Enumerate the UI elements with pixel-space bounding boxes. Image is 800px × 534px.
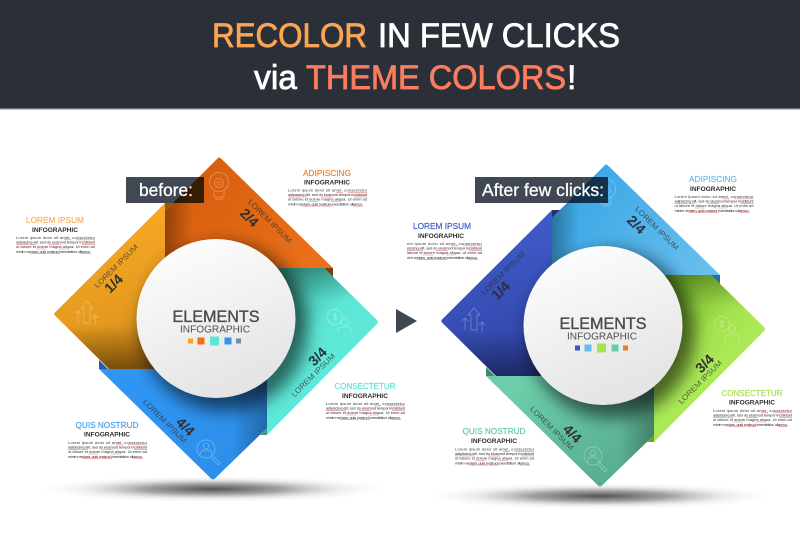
text block: quis nostrud after: adipiscing elit, sed do eiusmod tempor incididunt	[455, 451, 535, 456]
circle shadow	[140, 243, 308, 411]
label: before	[126, 177, 204, 203]
text block: quis nostrud after: ut labore et dolore magna aliqua. Ut enim ad	[455, 456, 534, 461]
text block: consectetur after: ut labore et dolore magna aliqua. Ut enim ad	[713, 417, 792, 422]
segment 1/4 orange	[54, 203, 173, 369]
text block: quis nostrud after: QUIS NOSTRUD	[462, 426, 526, 436]
segment labels: 4/4	[560, 421, 585, 446]
title line 1: IN FEW CLICKS	[378, 17, 620, 55]
segment labels: LOREM IPSUM	[480, 250, 527, 297]
text block: lorem ipsum before: INFOGRAPHIC	[32, 227, 78, 234]
disc title: ELEMENTS	[172, 308, 260, 326]
segment 2/4 dark orange	[165, 158, 333, 277]
central disc	[524, 246, 682, 405]
label: after few clicks: After few clicks:	[482, 180, 604, 200]
text block: quis nostrud before: minim veniam, quis nostrud exercitation ullamco.	[68, 454, 143, 459]
segment labels: LOREM IPSUM	[677, 359, 724, 406]
text block: adipiscing before	[288, 168, 368, 206]
text block: consectetur after: CONSECTETUR	[722, 388, 782, 398]
text block: quis nostrud after: Lorem ipsum dolor sit amet, consectetur	[455, 446, 535, 452]
ground shadow right	[428, 483, 772, 509]
text block: adipiscing before: ut labore et dolore magna aliqua. Ut enim ad	[288, 197, 367, 202]
colour swatches	[575, 344, 628, 352]
text block: lorem ipsum before: minim veniam, quis nostrud exercitation ullamco.	[16, 249, 91, 254]
arrow between diagrams	[396, 309, 417, 333]
title line 1	[212, 17, 620, 55]
icon: light bulb with gear	[210, 172, 228, 199]
disc title: ELEMENTS	[560, 315, 646, 333]
segment labels: 3/4	[692, 351, 717, 376]
text block: lorem ipsum after: em ipsum dolor sit amet, consectetur	[407, 241, 483, 246]
label: before: before:	[139, 180, 193, 200]
segment 4/4 mint	[486, 367, 654, 486]
icon: light bulb with gear	[596, 180, 616, 206]
text block: lorem ipsum after: labore et dolore magna aliqua. Ut enim ad	[407, 250, 482, 255]
text block: adipiscing before: minim veniam, quis nostrud exercitation ullamco.	[288, 201, 363, 206]
segment labels: 1/4	[101, 271, 126, 296]
segment labels: LOREM IPSUM	[141, 398, 188, 445]
diagram: after few clicks	[441, 164, 765, 486]
segment labels: 2/4	[624, 212, 649, 237]
text block: adipiscing after: minim veniam, quis nostrud exercitation ullamco.	[674, 208, 750, 213]
segment labels: 1/4	[488, 278, 513, 303]
disc subtitle: INFOGRAPHIC	[180, 324, 250, 336]
text block: consectetur before	[326, 381, 406, 420]
text block: quis nostrud after: INFOGRAPHIC	[471, 438, 517, 445]
title line 2: via	[254, 59, 297, 97]
text block: lorem ipsum before	[16, 215, 96, 254]
text block: adipiscing after	[674, 174, 754, 213]
text block: adipiscing before: INFOGRAPHIC	[304, 180, 350, 186]
segment 4/4 blue	[99, 360, 267, 480]
text block: adipiscing before: adipiscing elit, sed do eiusmod tempor incididunt	[288, 192, 368, 197]
text block: adipiscing after: Lorem ipsum dolor sit amet, consectetur	[674, 194, 754, 199]
text block: consectetur after	[713, 388, 793, 427]
segment labels: LOREM IPSUM	[246, 198, 293, 245]
text block: quis nostrud before	[68, 420, 148, 459]
text block: lorem ipsum before: Lorem ipsum dolor sit amet, consectetur	[16, 235, 96, 240]
text block: consectetur after: minim veniam, quis nostrud exercitation ullamco.	[713, 422, 788, 427]
text block: adipiscing after: adipiscing elit, sed do eiusmod tempor incididunt	[674, 199, 754, 204]
text block: consectetur before: CONSECTETUR	[334, 381, 396, 391]
text block: quis nostrud before: adipiscing elit, sed do eiusmod tempor incididunt	[68, 445, 148, 450]
text block: consectetur before: Lorem ipsum dolor sit amet, consectetur	[326, 401, 406, 406]
text block: adipiscing after: INFOGRAPHIC	[690, 186, 736, 193]
segment 3/4 lime	[647, 275, 765, 442]
text block: quis nostrud after: minim veniam, quis nostrud exercitation ullamco.	[455, 460, 530, 465]
text block: quis nostrud before: QUIS NOSTRUD	[76, 420, 138, 430]
segment labels	[480, 205, 724, 452]
icon: money and person	[328, 310, 352, 333]
text block: quis nostrud after	[455, 426, 535, 465]
circle shadow	[527, 250, 695, 418]
icon: money and person	[714, 316, 739, 340]
text block: adipiscing before: Lorem ipsum dolor sit amet, consectetur	[288, 188, 368, 192]
segment 2/4 sky blue	[552, 164, 720, 284]
text block: consectetur before: ut labore et dolore magna aliqua. Ut enim ad	[326, 410, 405, 415]
icon: person in magnifier	[197, 440, 220, 465]
icon: person in magnifier	[584, 447, 607, 472]
text block: quis nostrud before: ut labore et dolore magna aliqua. Ut enim ad	[68, 449, 147, 454]
text block: lorem ipsum before: adipiscing elit, sed do eiusmod tempor incididunt	[16, 240, 96, 245]
segment labels: 3/4	[305, 344, 330, 369]
text block: quis nostrud before: INFOGRAPHIC	[84, 432, 130, 438]
segment labels: LOREM IPSUM	[290, 352, 337, 399]
text block: consectetur after: INFOGRAPHIC	[729, 400, 775, 406]
text block: lorem ipsum after: piscing elit, sed do eiusmod tempor incididunt	[407, 246, 483, 251]
header banner	[0, 0, 800, 109]
disc subtitle: INFOGRAPHIC	[567, 330, 637, 342]
icon: arrows	[75, 301, 98, 325]
text block: adipiscing after: ut labore et dolore magna aliqua. Ut enim ad	[674, 203, 754, 208]
text block: lorem ipsum after: nim veniam, quis nostrud exercitation ullamco.	[407, 255, 478, 260]
segment 3/4 teal	[260, 268, 378, 435]
segment labels: LOREM IPSUM	[633, 205, 680, 252]
text block: quis nostrud before: Lorem ipsum dolor sit amet, consectetur	[68, 440, 148, 445]
text block: lorem ipsum before: ut labore et dolore magna aliqua. Ut enim ad	[16, 244, 95, 249]
ground shadow left	[41, 476, 385, 502]
text block: consectetur after: Lorem ipsum dolor sit amet, consectetur	[713, 408, 793, 413]
text block: consectetur before: minim veniam, quis nostrud exercitation ullamco.	[326, 415, 401, 420]
segment labels	[93, 198, 337, 445]
segment labels: 2/4	[237, 205, 262, 230]
colour swatches	[188, 336, 241, 346]
icon: arrows	[462, 308, 485, 332]
text block: consectetur before: adipiscing elit, sed do eiusmod tempor incididunt	[326, 406, 406, 411]
text block: consectetur after: adipiscing elit, sed do eiusmod tempor incididunt	[713, 413, 793, 418]
text block: lorem ipsum after: LOREM IPSUM	[413, 221, 471, 231]
diagram: before	[54, 158, 378, 480]
segment 1/4 indigo	[441, 210, 560, 376]
text block: consectetur before: INFOGRAPHIC	[342, 393, 388, 400]
title line 2: !	[567, 59, 576, 97]
text block: adipiscing after: ADIPISCING	[689, 174, 737, 184]
segment labels: LOREM IPSUM	[93, 243, 140, 290]
segment labels: 4/4	[173, 414, 198, 439]
text block: lorem ipsum after: INFOGRAPHIC	[418, 233, 464, 240]
text block: lorem ipsum after	[407, 221, 483, 260]
text block: adipiscing before: ADIPISCING	[303, 168, 351, 178]
title line 1: RECOLOR	[212, 17, 367, 55]
text block: lorem ipsum before: LOREM IPSUM	[26, 215, 84, 225]
title line 2: THEME COLORS	[306, 59, 566, 97]
central disc	[136, 239, 296, 398]
segment labels: LOREM IPSUM	[528, 405, 575, 452]
